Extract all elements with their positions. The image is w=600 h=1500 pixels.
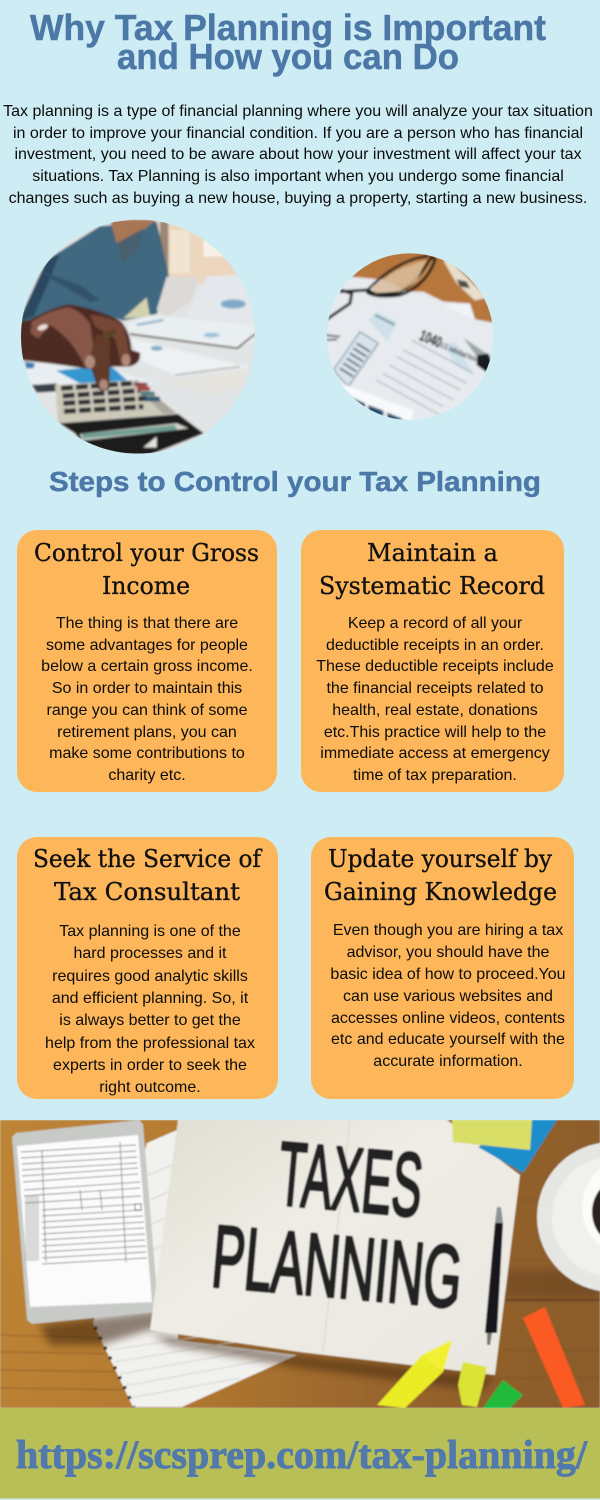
- card: Maintain a Systematic Record: immediate access at emergency: [320, 745, 550, 762]
- card: Control your Gross Income: below a certain gross income.: [41, 658, 253, 675]
- paper shadow: [150, 1333, 495, 1390]
- card: Update yourself by Gaining Knowledge: Even though you are hiring a tax: [333, 922, 563, 939]
- intro paragraph: investment, you need to be aware about how your investment will affect your tax: [14, 146, 582, 163]
- photo: 1040 tax form with glasses in circle: 1040: [417, 327, 444, 352]
- card: Control your Gross Income: charity etc.: [108, 767, 186, 784]
- card: Seek the Service of Tax Consultant: right outcome.: [99, 1079, 201, 1096]
- card: Control your Gross Income: Income: [102, 571, 190, 600]
- title: and How you can Do: [117, 36, 459, 77]
- card: Maintain a Systematic Record: Maintain a: [367, 538, 498, 567]
- card: Seek the Service of Tax Consultant: requires good analytic skills: [52, 968, 248, 985]
- card: Seek the Service of Tax Consultant: and efficient planning. So, it: [52, 990, 249, 1007]
- card: Maintain a Systematic Record: These deductible receipts include: [316, 658, 554, 675]
- footer band with URL: [0, 1408, 600, 1498]
- card: Maintain a Systematic Record: the financial receipts related to: [326, 680, 544, 697]
- intro paragraph: situations. Tax Planning is also important when you undergo some financial: [32, 168, 564, 185]
- footer band with URL: https://scsprep.com/tax-planning/: [16, 1432, 588, 1477]
- card: Seek the Service of Tax Consultant: Seek the Service of: [33, 844, 263, 873]
- card: Maintain a Systematic Record: time of tax preparation.: [353, 767, 517, 784]
- tablet shadow: [40, 1310, 165, 1345]
- card: Maintain a Systematic Record: Systematic Record: [319, 571, 545, 600]
- card: Update yourself by Gaining Knowledge: accesses online videos, contents: [331, 1010, 565, 1027]
- card: Maintain a Systematic Record: etc.This practice will help to the: [324, 724, 546, 741]
- calculator: [55, 380, 177, 423]
- card: Seek the Service of Tax Consultant: is always better to get the: [59, 1012, 241, 1029]
- handwriting: TAXES: [274, 1124, 426, 1236]
- card: Update yourself by Gaining Knowledge: accurate information.: [373, 1053, 523, 1070]
- card: Update yourself by Gaining Knowledge: can use various websites and: [343, 988, 553, 1005]
- notebook: [93, 1130, 297, 1407]
- card: Control your Gross Income: [17, 530, 277, 792]
- highlighters: [377, 1307, 585, 1408]
- intro paragraph: changes such as buying a new house, buying a property, starting a new business.: [9, 190, 587, 207]
- card: Update yourself by Gaining Knowledge: basic idea of how to proceed.You: [330, 966, 566, 983]
- sticky notes: [452, 1120, 557, 1173]
- hand: [18, 304, 140, 391]
- card: Update yourself by Gaining Knowledge: Gaining Knowledge: [324, 877, 557, 906]
- card: Control your Gross Income: retirement plans, you can: [57, 724, 237, 741]
- card: Seek the Service of Tax Consultant: Tax planning is one of the: [59, 923, 241, 940]
- coffee cup and saucer: [537, 1142, 600, 1292]
- intro paragraph: [3, 103, 593, 207]
- card: Update yourself by Gaining Knowledge: [311, 837, 574, 1099]
- card: Seek the Service of Tax Consultant: Tax Consultant: [54, 877, 240, 906]
- section heading: Steps to Control your Tax Planning: [49, 466, 541, 497]
- photo: taxes planning notepad on wooden desk: [0, 1120, 600, 1408]
- pen: [485, 1207, 503, 1345]
- title: [30, 7, 546, 77]
- card: Maintain a Systematic Record: deductible receipts in an order.: [326, 637, 544, 654]
- intro paragraph: Tax planning is a type of financial planning where you will analyze your tax situation: [3, 103, 593, 120]
- photo: 1040 tax form with glasses in circle: [323, 250, 497, 423]
- handwriting: [212, 1140, 460, 1310]
- card: Maintain a Systematic Record: [301, 530, 564, 792]
- photo: hand using calculator in circle: [17, 217, 260, 457]
- card: Control your Gross Income: range you can think of some: [46, 702, 248, 719]
- card: Update yourself by Gaining Knowledge: advisor, you should have the: [347, 944, 550, 961]
- title: Why Tax Planning is Important: [30, 7, 546, 48]
- card: Update yourself by Gaining Knowledge: etc and educate yourself with the: [331, 1031, 565, 1048]
- card: Seek the Service of Tax Consultant: help from the professional tax: [45, 1035, 255, 1052]
- notepad sheet: [150, 1120, 520, 1375]
- tablet: [12, 1120, 158, 1324]
- card: Control your Gross Income: Control your Gross: [34, 538, 259, 567]
- card: Control your Gross Income: So in order to maintain this: [52, 680, 242, 697]
- card: Maintain a Systematic Record: Keep a record of all your: [348, 615, 523, 632]
- card: Seek the Service of Tax Consultant: [17, 837, 278, 1099]
- card: Update yourself by Gaining Knowledge: Update yourself by: [328, 844, 552, 873]
- card: Maintain a Systematic Record: health, real estate, donations: [332, 702, 538, 719]
- card: Seek the Service of Tax Consultant: experts in order to seek the: [53, 1057, 247, 1074]
- card: Control your Gross Income: some advantages for people: [46, 637, 248, 654]
- card: Seek the Service of Tax Consultant: hard processes and it: [74, 945, 227, 962]
- card: Control your Gross Income: make some contributions to: [49, 745, 245, 762]
- photo: 1040 tax form with glasses in circle: U.S. Individual Income: [439, 341, 483, 366]
- intro paragraph: in order to improve your financial condition. If you are a person who has financial: [13, 125, 583, 142]
- card: Control your Gross Income: The thing is that there are: [56, 615, 238, 632]
